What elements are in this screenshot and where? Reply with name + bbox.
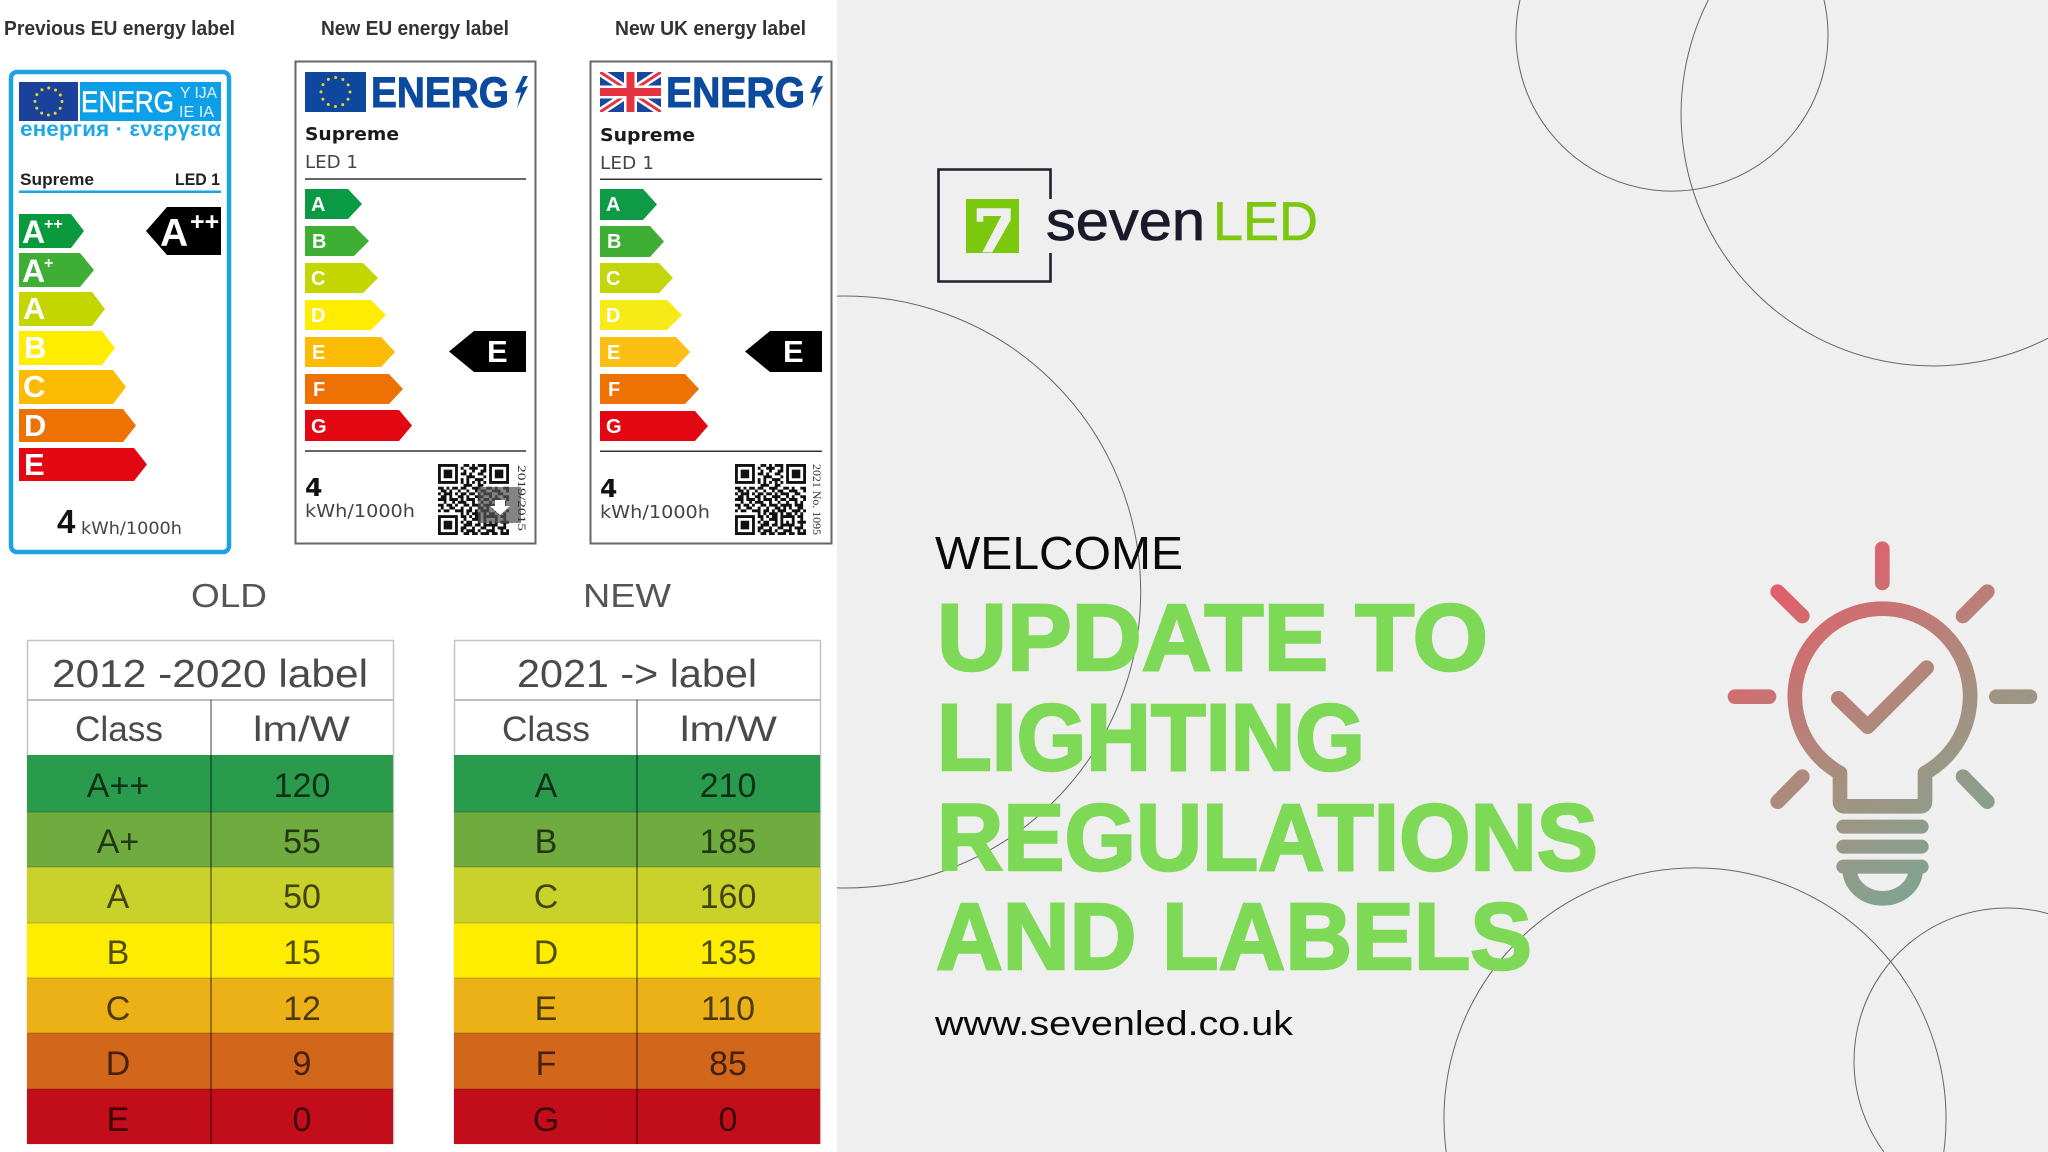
supplier name: Supreme — [20, 170, 94, 189]
row D: 135 — [700, 934, 756, 972]
title: update to lighting regulations and labels: AND LABELS — [936, 884, 1532, 990]
panel: previous EU energy label — [11, 72, 229, 552]
title: update to lighting regulations and labels: LIGHTING — [937, 685, 1365, 791]
row E: E — [107, 1101, 129, 1139]
class arrow A — [19, 291, 105, 326]
rating arrow E — [449, 331, 526, 372]
column header: class: Class — [75, 710, 163, 749]
consumption value: 4 — [305, 473, 322, 502]
heading: OLD: OLD — [191, 577, 267, 614]
title: update to lighting regulations and labels: UPDATE TO — [937, 585, 1488, 691]
row A++: A++ — [87, 767, 149, 805]
rating arrow E: E — [783, 334, 804, 369]
table title: 2021 -> label — [517, 653, 757, 696]
class arrow D: D — [311, 305, 325, 327]
row E: 0 — [293, 1101, 311, 1139]
column header: lm/W: lm/W — [253, 710, 350, 749]
class arrow D: D — [24, 408, 46, 443]
table: 2021 onwards label — [454, 640, 820, 1144]
welcome text: WELCOME — [935, 527, 1183, 579]
icon: logo frame — [938, 170, 1050, 282]
supplier name: Supreme — [600, 125, 695, 146]
column header: lm/W: lm/W — [680, 710, 777, 749]
class arrow A+: A — [22, 253, 45, 289]
row A: A — [535, 767, 558, 805]
row F: F — [536, 1045, 556, 1083]
row E — [535, 990, 755, 1028]
class arrow D: D — [606, 305, 620, 327]
row A+: A+ — [97, 823, 139, 861]
class arrow C: C — [606, 268, 620, 290]
class arrow A++: A — [22, 214, 45, 250]
rating arrow A++ — [146, 207, 221, 255]
class arrow B — [305, 226, 369, 256]
class arrow E — [600, 337, 690, 367]
class arrow B: B — [607, 231, 621, 253]
energy banner: ENERG — [81, 86, 174, 119]
class arrow G — [600, 411, 708, 441]
row G: G — [533, 1101, 559, 1139]
class arrow F: F — [313, 379, 325, 401]
class arrow A: A — [606, 194, 620, 216]
energy banner — [80, 82, 221, 121]
row B — [107, 934, 321, 972]
row A+: 55 — [283, 823, 321, 861]
rating arrow E — [745, 331, 822, 372]
class arrow E — [305, 337, 395, 367]
class arrow A — [305, 189, 362, 219]
row C — [534, 878, 756, 916]
class arrow E — [19, 447, 147, 482]
model name: LED 1 — [600, 153, 654, 174]
wordmark: seven: seven — [1046, 189, 1205, 252]
row A++: 120 — [274, 767, 330, 805]
title: update to lighting regulations and labels — [936, 585, 1598, 990]
row B — [535, 823, 756, 861]
class arrow F: F — [608, 379, 620, 401]
consumption unit: kWh/1000h — [305, 501, 415, 522]
title: update to lighting regulations and labels: REGULATIONS — [937, 785, 1598, 891]
regulation number: 2019/2015 — [515, 465, 529, 531]
multilingual energy word: енергия · ενεργεια — [20, 118, 221, 141]
class arrow A+ — [19, 253, 94, 289]
row A — [107, 878, 321, 916]
row C — [106, 990, 321, 1028]
row D: 9 — [293, 1045, 311, 1083]
heading: previous EU label: Previous EU energy label — [4, 18, 235, 40]
energy wordmark: ENERG — [371, 69, 509, 117]
row B: B — [535, 823, 557, 861]
class arrow A+: + — [44, 255, 53, 272]
class arrow G: G — [311, 416, 327, 438]
icon: UK flag — [600, 72, 661, 112]
icon: lightning bolt — [515, 76, 528, 108]
class arrow A — [600, 189, 657, 220]
wordmark: LED: LED — [1213, 190, 1318, 252]
model name: LED 1 — [175, 170, 220, 189]
column header: class: Class — [502, 710, 590, 749]
class arrow A: A — [23, 291, 45, 326]
class arrow E: E — [312, 342, 325, 364]
logo: sevenLED — [938, 170, 1318, 282]
panel: white left side — [0, 0, 837, 1152]
row C: 12 — [283, 990, 321, 1028]
row C: C — [534, 878, 558, 916]
class arrow F — [305, 374, 403, 404]
heading: new EU label: New EU energy label — [321, 18, 509, 40]
class arrow D — [600, 300, 682, 330]
row F — [536, 1045, 747, 1083]
consumption value: 4 — [57, 503, 76, 540]
class arrow B: B — [24, 330, 46, 365]
rating arrow A++: A — [160, 212, 188, 255]
consumption unit: kWh/1000h — [600, 502, 710, 523]
class arrow B: B — [312, 231, 326, 253]
rating arrow A++: ++ — [190, 208, 219, 236]
class arrow A++ — [19, 214, 84, 250]
consumption unit: kWh/1000h — [81, 519, 182, 539]
icon: EU flag — [19, 82, 78, 121]
QR code — [735, 465, 806, 534]
energy wordmark: ENERG — [666, 69, 805, 117]
class arrow E: E — [24, 447, 45, 482]
row C: 160 — [700, 878, 756, 916]
row C: C — [106, 990, 130, 1028]
row A++ — [87, 767, 330, 805]
class arrow D — [19, 408, 136, 443]
row D: D — [106, 1045, 130, 1083]
energy banner: Y IJA — [180, 85, 217, 102]
row E: 110 — [701, 990, 755, 1028]
row G: 0 — [719, 1101, 737, 1139]
row G — [533, 1101, 737, 1139]
row D: D — [534, 934, 558, 972]
class arrow F — [600, 374, 699, 404]
row A: 50 — [283, 878, 321, 916]
panel: new UK energy label — [590, 62, 832, 544]
consumption value: 4 — [600, 474, 617, 503]
row A: A — [107, 878, 130, 916]
class arrow C: C — [23, 369, 45, 404]
energy banner: IE IA — [179, 104, 214, 121]
row F: 85 — [709, 1045, 747, 1083]
icon: EU flag — [305, 72, 366, 112]
row E: E — [535, 990, 557, 1028]
class arrow B — [19, 330, 115, 365]
rating arrow E: E — [487, 334, 508, 369]
class arrow C: C — [311, 268, 325, 290]
class arrow G — [305, 410, 412, 441]
row A: 210 — [700, 767, 756, 805]
row B: 15 — [283, 934, 321, 972]
class arrow C — [305, 263, 378, 293]
class arrow A++: ++ — [44, 216, 63, 233]
website url: www.sevenled.co.uk — [934, 1005, 1294, 1043]
class arrow G: G — [606, 416, 622, 438]
row E — [107, 1101, 311, 1139]
table: 2012-2020 label — [27, 640, 394, 1144]
QR code with download overlay — [438, 465, 521, 534]
class arrow C — [600, 263, 673, 293]
heading: new UK label: New UK energy label — [615, 18, 806, 40]
class arrow E: E — [607, 342, 620, 364]
table title: 2012 -2020 label — [52, 653, 368, 696]
row D — [106, 1045, 311, 1083]
model name: LED 1 — [305, 152, 358, 173]
icon: green square with 7 — [966, 199, 1019, 253]
panel: new EU energy label — [296, 62, 536, 544]
regulation number: 2021 No. 1095 — [810, 464, 824, 535]
class arrow C — [19, 369, 126, 404]
row A+ — [97, 823, 321, 861]
supplier name: Supreme — [305, 124, 399, 145]
class arrow A: A — [311, 194, 325, 216]
class arrow B — [600, 226, 664, 257]
row B: B — [107, 934, 129, 972]
row A — [535, 767, 756, 805]
row D — [534, 934, 756, 972]
icon: light bulb with check mark — [1735, 549, 2030, 898]
panel: grey right side — [837, 0, 2048, 1152]
heading: NEW: NEW — [583, 577, 672, 614]
icon: lightning bolt — [810, 76, 823, 108]
row B: 185 — [700, 823, 756, 861]
class arrow D — [305, 300, 386, 330]
